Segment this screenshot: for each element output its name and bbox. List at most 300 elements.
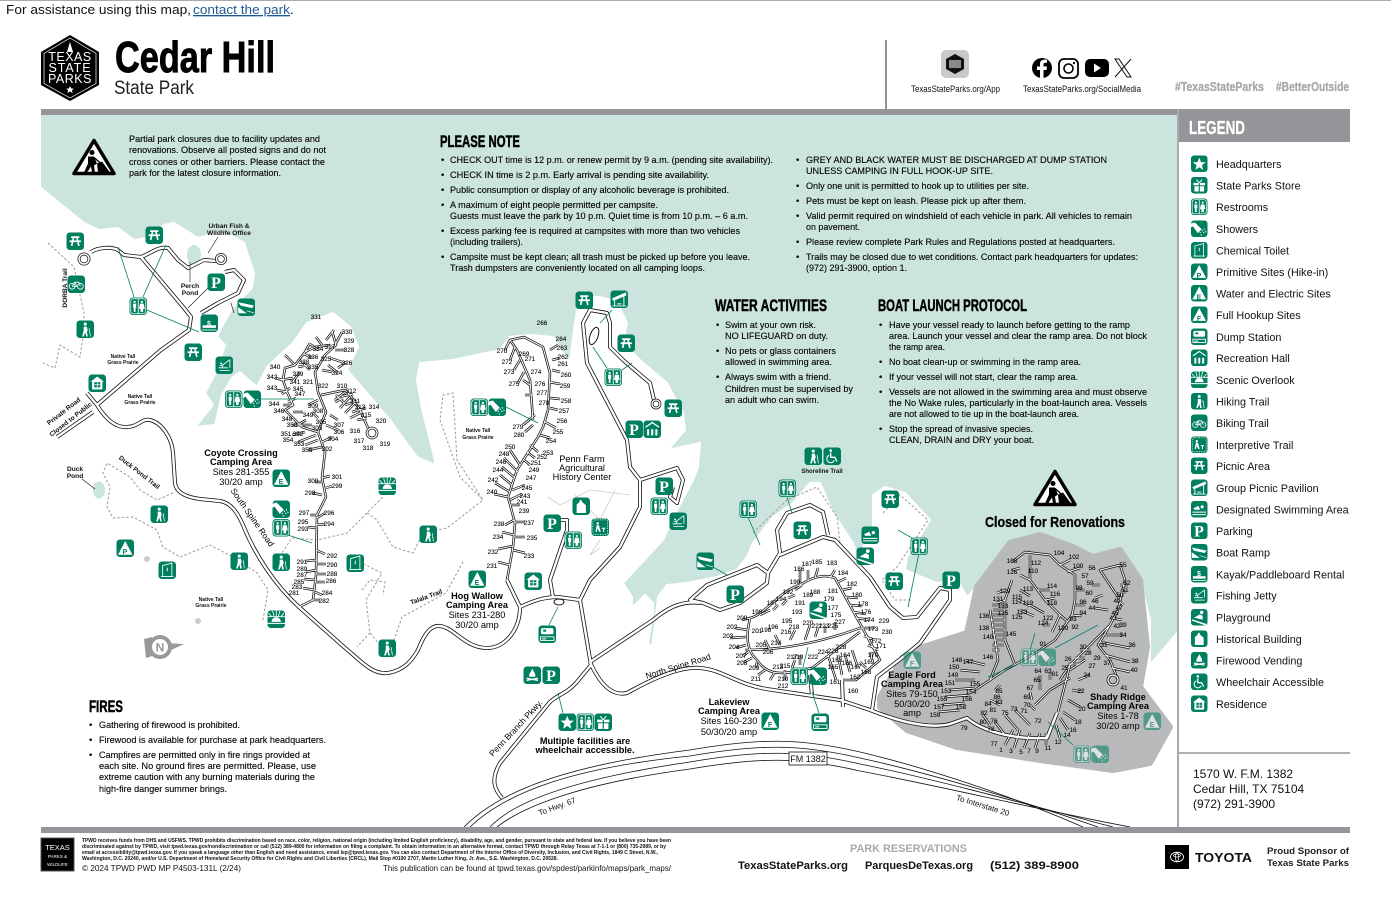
site numbers: Hog Wallow: 237: [524, 520, 535, 527]
site numbers: Lakeview: 169: [864, 659, 875, 666]
site numbers: Coyote Crossing: 315: [361, 412, 372, 419]
text: please note right column: GREY AND BLACK WATER MUST BE DISCHARGED AT DUMP STATION: [806, 155, 1107, 166]
site numbers: Lakeview: 213: [773, 664, 784, 671]
map place labels: Grass Prairie: [462, 435, 494, 441]
site numbers: Hog Wallow: 273: [504, 369, 515, 376]
site numbers: Lakeview: 164: [840, 652, 851, 659]
top assistance text: contact the park: [193, 2, 290, 17]
text: please note left column: •: [441, 155, 444, 166]
legend list: Chemical Toilet: [1216, 246, 1289, 258]
site numbers: Coyote Crossing: 293: [298, 526, 309, 533]
text: fires: extreme caution with any burning materials during the: [99, 772, 315, 783]
site numbers: Hog Wallow: 239: [519, 508, 530, 515]
site numbers: Coyote Crossing: 321: [303, 379, 314, 386]
map place labels: Native Tall: [111, 354, 136, 360]
site numbers: Lakeview: 166: [842, 660, 853, 667]
site numbers: Coyote Crossing: 349: [303, 412, 314, 419]
site numbers: Hog Wallow: 269: [519, 351, 530, 358]
text: water activities: an adult who can swim.: [725, 395, 819, 406]
site numbers: Lakeview: 216: [781, 629, 792, 636]
label: Coyote Crossing: [204, 448, 278, 487]
text: please note right column: UNLESS CAMPING IN FULL HOOK-UP SITE.: [806, 166, 993, 177]
top assistance text: .: [290, 2, 294, 17]
site numbers: Hog Wallow: 270: [497, 348, 508, 355]
app icon and link: [911, 50, 1000, 94]
site numbers: Eagle Ford: 148: [952, 657, 963, 664]
label: Coyote Crossing: 30/20 amp: [219, 477, 263, 487]
legend list: Fishing Jetty: [1216, 590, 1277, 602]
rotated road and trail names: To Interstate 20: [955, 793, 1011, 818]
site numbers: Eagle Ford: 112: [1031, 560, 1042, 567]
site numbers: Shady Ridge: 41: [1120, 685, 1128, 692]
site numbers: Eagle Ford: 75: [1001, 710, 1009, 717]
text: fires: Gathering of firewood is prohibited.: [99, 720, 240, 731]
legend list: Showers: [1216, 224, 1259, 236]
penn farm grey paths: [548, 490, 630, 555]
parking icons: P: [946, 573, 956, 590]
heading: please note: PLEASE NOTE: [440, 132, 520, 151]
site numbers: Eagle Ford: 151: [945, 680, 956, 687]
label: Hog Wallow: Hog Wallow: [451, 591, 504, 601]
site numbers: Coyote Crossing: 298: [305, 490, 316, 497]
site numbers: Lakeview: 161: [830, 679, 841, 686]
site numbers: Eagle Ford: 133: [998, 603, 1009, 610]
road network: [57, 248, 1130, 798]
site numbers: Coyote Crossing: 307: [334, 422, 345, 429]
site numbers: Hog Wallow: 277: [537, 390, 548, 397]
site numbers: Coyote Crossing: 310: [337, 383, 348, 390]
label: Shady Ridge: Camping Area: [1087, 701, 1150, 711]
site numbers: Shady Ridge: 65: [1033, 677, 1041, 684]
label: Penn Farm: [553, 454, 611, 482]
text: please note left column: Excess parking fee is required at campsites with more than two vehicles: [450, 226, 740, 237]
site numbers: Lakeview: 186: [794, 566, 805, 573]
park address: (972) 291-3900: [1193, 797, 1275, 811]
icon: closure warning: [74, 140, 114, 174]
label: Hog Wallow: 30/20 amp: [455, 620, 499, 630]
site numbers: Coyote Crossing: 336: [308, 354, 319, 361]
site numbers: Coyote Crossing: 311: [350, 398, 361, 405]
bottom grey rule: [41, 827, 1350, 833]
site numbers: Eagle Ford: 82: [980, 710, 988, 717]
legend separator: [1177, 109, 1179, 827]
site numbers: Lakeview: 218: [789, 624, 800, 631]
text: nondiscrimination notice: email at accessibility@tpwd.texas.gov. If you speak a language other than English and need assistance, email lep@tpwd.texas.gov. You can also contact Department of the Interior Office of Diversity, Inclusion, and Civil Rights, 1849 C Street, N.W.,: [82, 850, 659, 856]
site numbers: Eagle Ford: 120: [1058, 625, 1069, 632]
legend list: Biking Trail: [1216, 418, 1269, 430]
site numbers: Coyote Crossing: 327: [325, 344, 336, 351]
site numbers: Hog Wallow: 235: [527, 535, 538, 542]
site numbers: Lakeview: 168: [861, 669, 872, 676]
icon: closed warning: [1035, 472, 1075, 504]
legend list: Water and Electric Sites: [1216, 288, 1331, 300]
text: please note left column: •: [441, 226, 444, 237]
text: fires: each site. No ground fires are permitted. Please, use: [99, 761, 316, 772]
map place labels: Pond: [67, 473, 83, 480]
site numbers: Shady Ridge: 9: [1035, 748, 1039, 755]
site numbers: Eagle Ford: 77: [990, 741, 998, 748]
ponds: [93, 245, 201, 624]
park reservations: [738, 843, 1079, 872]
text: boat launch protocol: No boat clean-up or swimming in the ramp area.: [889, 357, 1081, 368]
note: multiple facilities: wheelchair accessible.: [534, 745, 635, 755]
site numbers: Hog Wallow: 274: [531, 369, 542, 376]
site numbers: Coyote Crossing: 346: [274, 408, 285, 415]
label: Shady Ridge: Shady Ridge: [1090, 692, 1146, 702]
label: Eagle Ford: [881, 670, 944, 718]
site numbers: Coyote Crossing: 283: [292, 584, 303, 591]
site numbers: Coyote Crossing: 341: [290, 379, 301, 386]
site numbers: Lakeview: 162: [850, 674, 861, 681]
map place labels: Perch: [181, 283, 199, 290]
hashtags: [1175, 80, 1349, 94]
legend list: Residence: [1216, 699, 1267, 711]
site numbers: Hog Wallow: 257: [559, 408, 570, 415]
site numbers: Shady Ridge: 27: [1088, 663, 1096, 670]
site numbers: Hog Wallow: 254: [546, 438, 557, 445]
site numbers: Lakeview: 221: [812, 623, 823, 630]
label: Coyote Crossing: Coyote Crossing: [204, 448, 278, 458]
site numbers: Coyote Crossing: 352: [293, 431, 304, 438]
site numbers: Hog Wallow: 251: [531, 460, 542, 467]
label: Hog Wallow: Sites 231-280: [449, 610, 505, 620]
site numbers: Shady Ridge: 49: [1113, 598, 1121, 605]
label: Shady Ridge: 30/20 amp: [1096, 721, 1140, 731]
site numbers: Lakeview: 211: [751, 676, 762, 683]
site numbers: Lakeview: 214: [771, 640, 782, 647]
heading: fires: FIRES: [89, 697, 123, 716]
site numbers: Coyote Crossing: 312: [346, 388, 357, 395]
site numbers: Lakeview: 195: [782, 618, 793, 625]
site numbers: Coyote Crossing: 338: [299, 359, 310, 366]
legend list: [1191, 156, 1349, 712]
legend list: F: [1197, 316, 1202, 323]
land: [41, 188, 1177, 827]
rotated road and trail names: [46, 268, 1011, 818]
text: boat launch protocol: •: [879, 320, 882, 331]
campsite icons: P: [123, 549, 128, 556]
site numbers: Hog Wallow: 253: [543, 450, 554, 457]
site numbers: Hog Wallow: 263: [557, 345, 568, 352]
site numbers: Shady Ridge: 25: [1061, 665, 1069, 672]
site numbers: Eagle Ford: 122: [1043, 615, 1054, 622]
site numbers: Coyote Crossing: 288: [327, 571, 338, 578]
text: nondiscrimination notice: [82, 838, 671, 862]
rotated road and trail names: Talala Trail: [409, 589, 444, 607]
site numbers: Lakeview: 210: [778, 676, 789, 683]
site numbers: Eagle Ford: 149: [948, 672, 959, 679]
text: water activities: NO LIFEGUARD on duty.: [725, 331, 828, 342]
site numbers: Shady Ridge: 42: [1113, 623, 1121, 630]
site numbers: Shady Ridge: 12: [1054, 739, 1062, 746]
site numbers: Hog Wallow: 262: [558, 354, 569, 361]
text: fires: Campfires are permitted only in fire rings provided at: [99, 750, 310, 761]
panel: closed for renovations grey area: [880, 535, 1170, 770]
park reservations: (512) 389-8900: [990, 860, 1079, 872]
site numbers: Eagle Ford: 84: [984, 701, 992, 708]
north arrow: [144, 637, 184, 658]
text: please note left column: •: [441, 252, 444, 263]
note: multiple facilities: [534, 736, 635, 755]
site numbers: Lakeview: 160: [848, 688, 859, 695]
site numbers: Coyote Crossing: 322: [318, 383, 329, 390]
site numbers: Lakeview: 197: [767, 600, 778, 607]
site numbers: Coyote Crossing: 345: [293, 386, 304, 393]
site numbers: Eagle Ford: 156: [962, 696, 973, 703]
text: water activities: •: [716, 372, 719, 383]
site numbers: Lakeview: 207: [736, 653, 747, 660]
site numbers: Hog Wallow: 264: [556, 336, 567, 343]
parking icons: [208, 274, 960, 685]
site numbers: Lakeview: 206: [763, 649, 774, 656]
text: boat launch protocol: •: [879, 357, 882, 368]
text: water activities: •: [716, 346, 719, 357]
site numbers: Eagle Ford: [930, 550, 1087, 748]
text: closure notice: park for the latest closure information.: [129, 168, 281, 179]
park reservations: ParquesDeTexas.org: [865, 860, 973, 872]
logo: Texas State Parks: [41, 35, 99, 101]
site numbers: Coyote Crossing: 290: [327, 562, 338, 569]
site numbers: Coyote Crossing: 304: [328, 436, 339, 443]
site numbers: Hog Wallow: 232: [488, 549, 499, 556]
text: water activities: No pets or glass containers: [725, 346, 836, 357]
site numbers: Coyote Crossing: 320: [376, 418, 387, 425]
site numbers: Coyote Crossing: 297: [299, 510, 310, 517]
text: boat launch protocol: the No Wake rules, particularly in the boat-launch area. Vessels: [889, 398, 1147, 409]
site numbers: Eagle Ford: 126: [1007, 569, 1018, 576]
map place labels: Native Tall: [199, 597, 224, 603]
site numbers: Lakeview: 203: [723, 633, 734, 640]
text: publication info: © 2024 TPWD PWD MP P4503-131L (2/24): [82, 863, 241, 873]
campsite icons: E: [279, 479, 284, 486]
site numbers: Coyote Crossing: 351: [281, 431, 292, 438]
site numbers: Eagle Ford: 118: [1047, 600, 1058, 607]
site numbers: Shady Ridge: 56: [1088, 565, 1096, 572]
site numbers: Eagle Ford: 110: [1028, 568, 1039, 575]
site numbers: Eagle Ford: 79: [960, 725, 968, 732]
site numbers: Shady Ridge: 57: [1081, 573, 1089, 580]
site numbers: Shady Ridge: 22: [1077, 688, 1085, 695]
site numbers: Lakeview: 194: [776, 596, 787, 603]
site numbers: Lakeview: 222: [808, 654, 819, 661]
heading: boat launch protocol: BOAT LAUNCH PROTOCOL: [878, 296, 1027, 315]
rotated road and trail names: To Hwy. 67: [537, 796, 578, 818]
label: Penn Farm: History Center: [553, 472, 611, 482]
site numbers: Coyote Crossing: 339: [293, 371, 304, 378]
map place labels: Shoreline Trail: [801, 469, 843, 475]
site numbers: Lakeview: 201: [752, 628, 763, 635]
site numbers: Eagle Ford: 93: [1069, 616, 1077, 623]
site numbers: Eagle Ford: 102: [1069, 554, 1080, 561]
site numbers: Shady Ridge: 24: [1083, 672, 1091, 679]
text: please note left column: CHECK OUT time is 12 p.m. or renew permit by 9 a.m. (pending site availability).: [450, 155, 773, 166]
text: please note left column: Guests must leave the park by 10 p.m. Quiet time is from 10 p.m. – 6 a.m.: [450, 211, 748, 222]
panel: map background water: [41, 109, 1177, 827]
site numbers: Lakeview: 196: [768, 624, 779, 631]
site numbers: Lakeview: 175: [831, 612, 842, 619]
site numbers: Coyote Crossing: 313: [355, 404, 366, 411]
site numbers: Lakeview: 202: [727, 624, 738, 631]
site numbers: Lakeview: 224: [818, 649, 829, 656]
site numbers: Eagle Ford: 157: [934, 704, 945, 711]
site numbers: Hog Wallow: 255: [553, 429, 564, 436]
site numbers: Eagle Ford: 91: [1039, 641, 1047, 648]
site numbers: Coyote Crossing: 303: [312, 425, 323, 432]
text: publication info: This publication can be found at tpwd.texas.gov/spdest/parkinfo/maps/park_maps/: [383, 863, 672, 873]
site numbers: Coyote Crossing: 319: [380, 441, 391, 448]
site numbers: Coyote Crossing: 294: [324, 521, 335, 528]
site numbers: Lakeview: 219: [793, 654, 804, 661]
text: boat launch protocol: the ramp area.: [889, 342, 945, 353]
text: fires: high-fire danger summer brings.: [99, 784, 227, 795]
site numbers: Shady Ridge: 52: [1123, 580, 1131, 587]
site numbers: Coyote Crossing: 353: [294, 441, 305, 448]
site numbers: Eagle Ford: 100: [1073, 563, 1084, 570]
site numbers: Eagle Ford: 113: [1023, 586, 1034, 593]
dashed trails: [43, 243, 928, 647]
site numbers: Lakeview: 198: [761, 627, 772, 634]
site numbers: Coyote Crossing: 286: [326, 578, 337, 585]
legend list: Interpretive Trail: [1216, 440, 1293, 452]
legend list: Parking: [1216, 526, 1253, 538]
heading: water activities: WATER ACTIVITIES: [715, 296, 827, 315]
label: Lakeview: 50/30/20 amp: [701, 727, 757, 737]
site numbers: Eagle Ford: 78: [987, 726, 995, 733]
legend divider: [1179, 752, 1350, 754]
site numbers: Hog Wallow: 249: [529, 467, 540, 474]
site numbers: Eagle Ford: 125: [1012, 614, 1023, 621]
map place labels: Urban Fish &: [208, 223, 250, 230]
legend list: Restrooms: [1216, 202, 1269, 214]
site numbers: Shady Ridge: 28: [1084, 650, 1092, 657]
site numbers: Hog Wallow: 238: [494, 521, 505, 528]
legend list: Designated Swimming Area: [1216, 504, 1349, 516]
site numbers: Lakeview: 176: [861, 609, 872, 616]
text: fires: [89, 720, 326, 795]
text: fires: •: [89, 720, 92, 731]
site numbers: Eagle Ford: 158: [956, 704, 967, 711]
site numbers: Shady Ridge: 16: [1069, 727, 1077, 734]
site numbers: Coyote Crossing: 305: [316, 419, 327, 426]
site numbers: Coyote Crossing: 289: [297, 566, 308, 573]
map icons: [66, 226, 928, 731]
site numbers: Lakeview: 179: [824, 596, 835, 603]
site numbers: Eagle Ford: 98: [1075, 585, 1083, 592]
legend list: P: [1197, 273, 1202, 280]
site numbers: Lakeview: 165: [828, 664, 839, 671]
site numbers: Lakeview: 177: [828, 605, 839, 612]
site numbers: Lakeview: 205: [756, 642, 767, 649]
legend list: E: [1197, 294, 1202, 302]
site numbers: Coyote Crossing: 285: [294, 579, 305, 586]
legend header: LEGEND: [1189, 118, 1245, 138]
park address: 1570 W. F.M. 1382: [1193, 767, 1293, 781]
site numbers: Hog Wallow: 261: [558, 361, 569, 368]
campsite icons: E: [475, 580, 480, 587]
logo: Texas State Parks: STATE: [49, 61, 91, 75]
rotated road and trail names: Closed to Public: [49, 401, 94, 438]
legend list: Group Picnic Pavilion: [1216, 483, 1319, 495]
legend list: State Parks Store: [1216, 180, 1301, 192]
text: water activities: [716, 320, 853, 406]
header divider: [885, 40, 887, 110]
text: nondiscrimination notice: TPWD receives funds from DHS and USFWS. TPWD prohibits discrimination based on race, color, religion, national origin (including limited English proficiency), disability, age, and gender, pursuant to state and federal law. If you believe you have been: [82, 838, 671, 844]
site numbers: Coyote Crossing: 335: [308, 364, 319, 371]
rotated road and trail names: South Spine Road: [229, 486, 276, 549]
site numbers: Shady Ridge: 26: [1064, 656, 1072, 663]
text: boat launch protocol: Stop the spread of invasive species.: [889, 424, 1033, 435]
label: Shady Ridge: Sites 1-78: [1097, 711, 1139, 721]
text: please note right column: •: [796, 252, 799, 263]
text: closure notice: [129, 134, 326, 179]
site numbers: Hog Wallow: 234: [493, 534, 504, 541]
site numbers: Hog Wallow: 245: [522, 485, 533, 492]
label: Eagle Ford: Eagle Ford: [888, 670, 936, 680]
site numbers: Eagle Ford: 155: [970, 681, 981, 688]
site numbers: Eagle Ford: 140: [983, 634, 994, 641]
site numbers: Lakeview: 185: [812, 559, 823, 566]
site numbers: Shady Ridge: 18: [1074, 719, 1082, 726]
map place labels: Wildlife Office: [207, 230, 251, 237]
text: boat launch protocol: If your vessel will not start, clear the ramp area.: [889, 372, 1078, 383]
site numbers: Shady Ridge: 72: [1034, 718, 1042, 725]
label: Eagle Ford: Camping Area: [881, 679, 944, 689]
site numbers: Coyote Crossing: 324: [332, 370, 343, 377]
text: please note right column: •: [796, 155, 799, 166]
site numbers: Shady Ridge: 50: [1116, 592, 1124, 599]
site numbers: Coyote Crossing: 334: [313, 346, 324, 353]
site numbers: Eagle Ford: 138: [979, 625, 990, 632]
site numbers: Hog Wallow: 279: [513, 424, 524, 431]
site numbers: Eagle Ford: 124: [1038, 620, 1049, 627]
site numbers: Shady Ridge: 69: [1023, 694, 1031, 701]
site numbers: Eagle Ford: 116: [1050, 591, 1061, 598]
legend list: Historical Building: [1216, 634, 1302, 646]
text: nondiscrimination notice: discriminated against by TPWD, visit tpwd.texas.gov/nondiscrimination or call (512) 389-4800 for information on filing a complaint. To obtain information in an alternative format, contact TPWD through Relay Texas at 7-1-1 or (800) 735-2989, or by: [82, 844, 666, 850]
social media icons and link: TexasStateParks.org/SocialMedia: [1023, 84, 1141, 94]
legend list: Picnic Area: [1216, 461, 1270, 473]
site numbers: Shady Ridge: 67: [1026, 685, 1034, 692]
label: Eagle Ford: 50/30/20: [894, 699, 930, 709]
map place labels: [67, 223, 843, 609]
site numbers: Coyote Crossing: 355: [302, 447, 313, 454]
map place labels: Grass Prairie: [124, 400, 156, 406]
legend list: Headquarters: [1216, 159, 1282, 171]
site numbers: Eagle Ford: 146: [983, 654, 994, 661]
text: please note right column: Please review complete Park Rules and Regulations posted at headquarters.: [806, 237, 1115, 248]
text: boat launch protocol: Vessels are not allowed in the swimming area and must observe: [889, 387, 1147, 398]
site numbers: Eagle Ford: 129: [1000, 588, 1011, 595]
site numbers: Shady Ridge: 11: [1045, 745, 1052, 752]
site numbers: Lakeview: 227: [835, 619, 846, 626]
site numbers: Lakeview: 174: [864, 617, 875, 624]
site numbers: Eagle Ford: 145: [1006, 631, 1017, 638]
site numbers: Eagle Ford: 147: [963, 659, 974, 666]
site numbers: Shady Ridge: 55: [1119, 562, 1127, 569]
site numbers: Eagle Ford: 85: [995, 688, 1003, 695]
site numbers: Lakeview: 183: [827, 560, 838, 567]
legend list: Recreation Hall: [1216, 353, 1290, 365]
site numbers: Lakeview: 192: [783, 589, 794, 596]
site numbers: Hog Wallow: 256: [557, 418, 568, 425]
site numbers: Lakeview: 212: [778, 683, 789, 690]
site numbers: Hog Wallow: 260: [561, 372, 572, 379]
rotated road and trail names: Private Road: [46, 397, 82, 427]
site numbers: Coyote Crossing: 347: [295, 391, 306, 398]
text: boat launch protocol: •: [879, 372, 882, 383]
text: fires: Firewood is available for purchase at park headquarters.: [99, 735, 326, 746]
site numbers: Lakeview: 217: [787, 654, 798, 661]
